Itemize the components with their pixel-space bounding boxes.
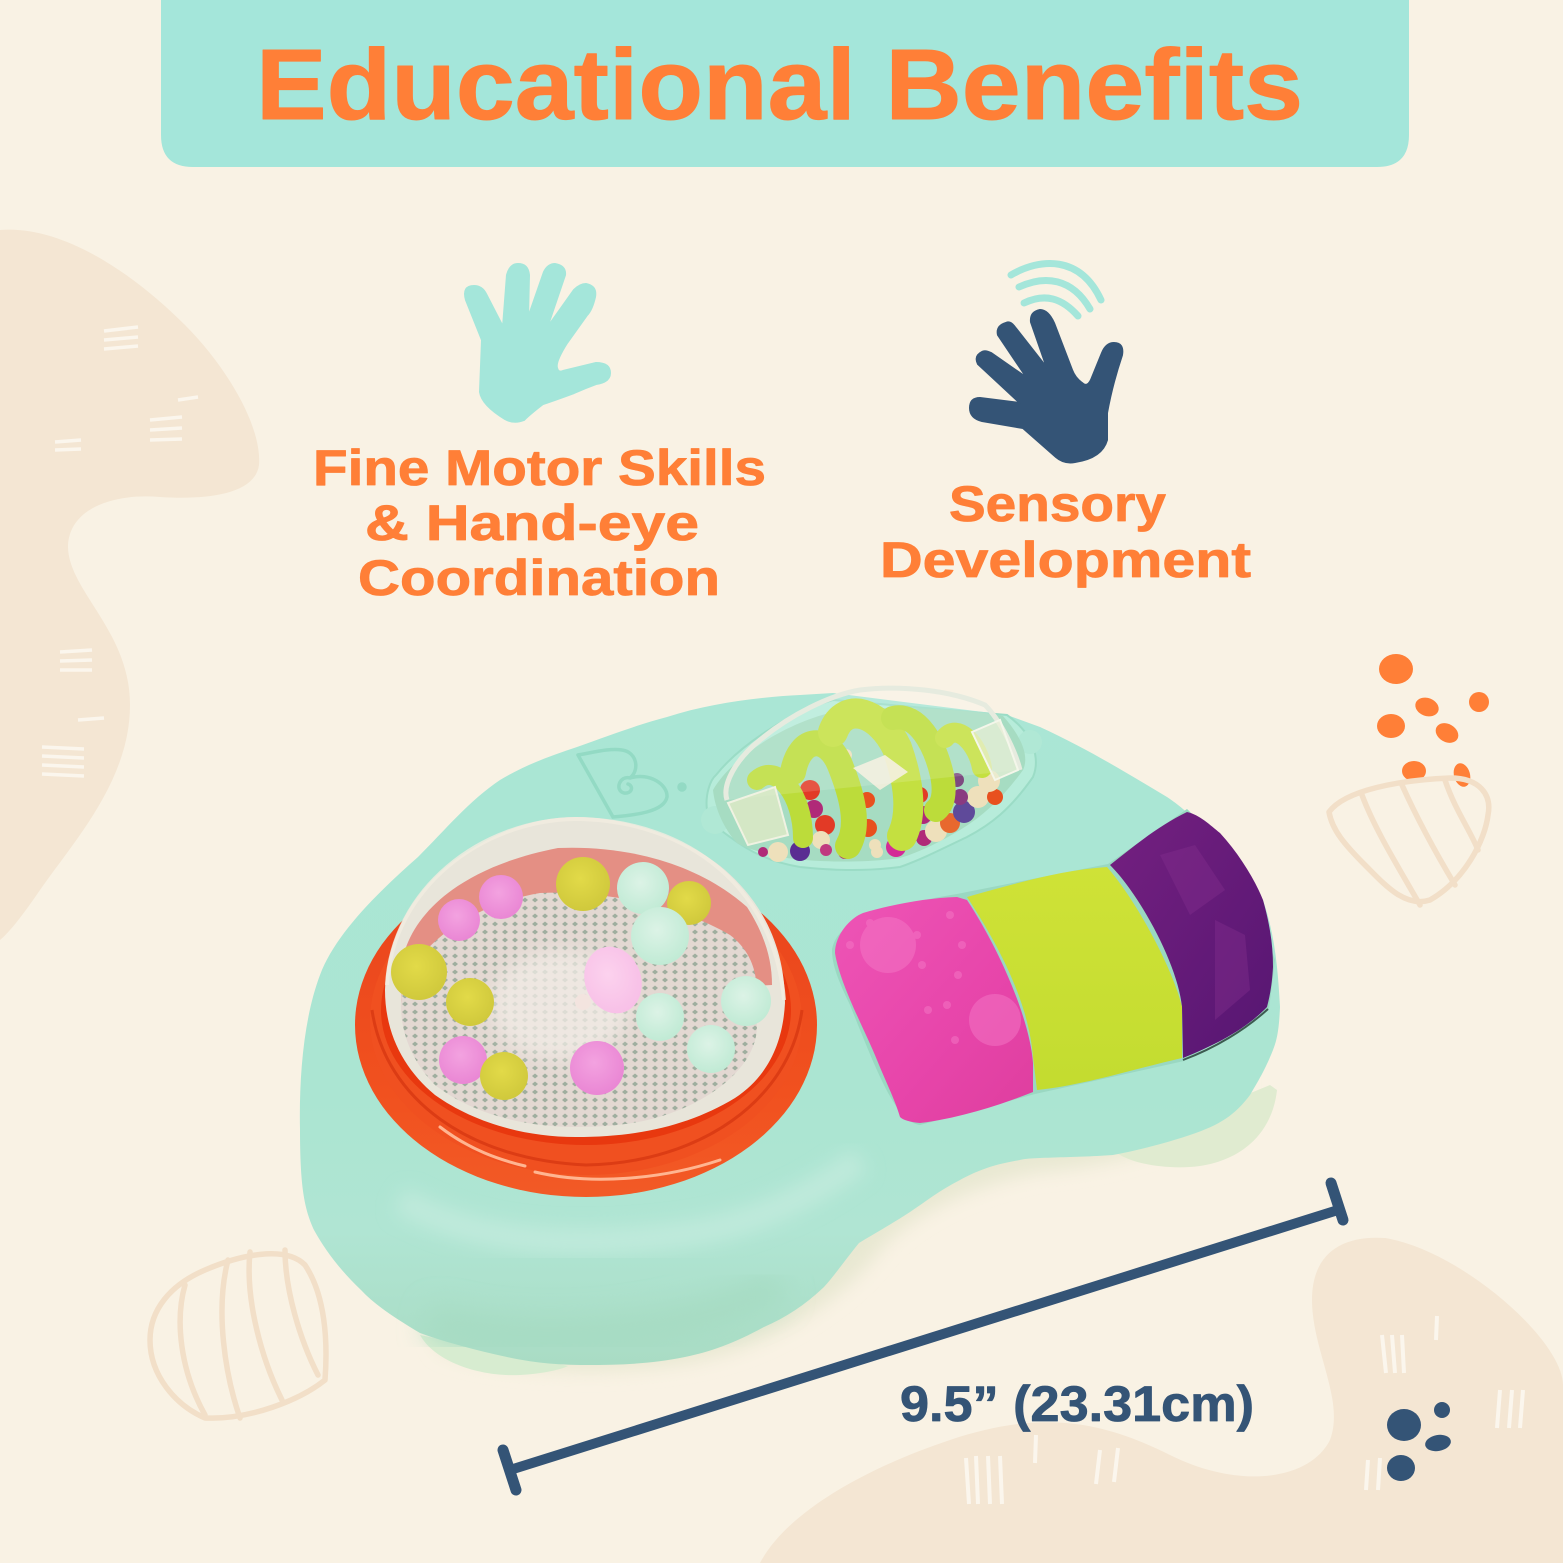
soft shadow (420, 1050, 1240, 1371)
dome highlight (387, 819, 784, 1000)
text: sensory development: Sensory (949, 476, 1166, 532)
keys (832, 809, 1275, 1125)
dimension line (503, 1183, 1343, 1490)
toy (300, 688, 1280, 1375)
lime key (967, 867, 1182, 1090)
mesh base (401, 893, 757, 1127)
background blob: bottom right (760, 1238, 1563, 1563)
text: fine motor skills: Coordination (358, 550, 720, 606)
reflection patch (853, 755, 908, 790)
background blob: left (0, 230, 259, 940)
base body (300, 693, 1280, 1365)
pink key (835, 897, 1033, 1123)
title banner (161, 0, 1409, 167)
window tray (707, 700, 1036, 870)
key well (832, 809, 1275, 1125)
sound waves (1011, 263, 1101, 316)
icon: teal hand (465, 264, 610, 422)
pompoms (391, 857, 771, 1100)
dimension label: 9.5” (23.31cm) (900, 1376, 1254, 1432)
title: Educational Benefits (256, 29, 1303, 141)
dome (385, 817, 785, 1137)
suction cups (420, 1335, 568, 1375)
pink key pattern (846, 911, 1021, 1046)
clear cover (726, 688, 1020, 800)
purple key (1110, 812, 1273, 1058)
mesh haze (490, 950, 630, 1060)
window tray bumps (701, 806, 729, 834)
icon: navy hand with waves (970, 263, 1122, 462)
body highlights (400, 1160, 860, 1242)
text: fine motor skills: & Hand-eye (365, 495, 699, 551)
decoration: orange dots (1377, 654, 1489, 789)
orange ring (355, 853, 817, 1197)
tray rim line (1183, 1009, 1268, 1060)
green coils (757, 713, 982, 846)
text: sensory development: Development (880, 532, 1251, 588)
text: fine motor skills (313, 440, 766, 606)
logo (578, 749, 685, 817)
beads (758, 749, 1003, 862)
window interior (713, 708, 1025, 862)
text: sensory development (880, 476, 1251, 588)
text: fine motor skills: Fine Motor Skills (313, 440, 766, 496)
hand shape (970, 310, 1122, 462)
salmon backing (401, 848, 772, 1003)
decoration: scribble right (1329, 778, 1489, 905)
decoration: navy dots (1387, 1402, 1452, 1481)
decoration: scribble left (150, 1250, 326, 1418)
